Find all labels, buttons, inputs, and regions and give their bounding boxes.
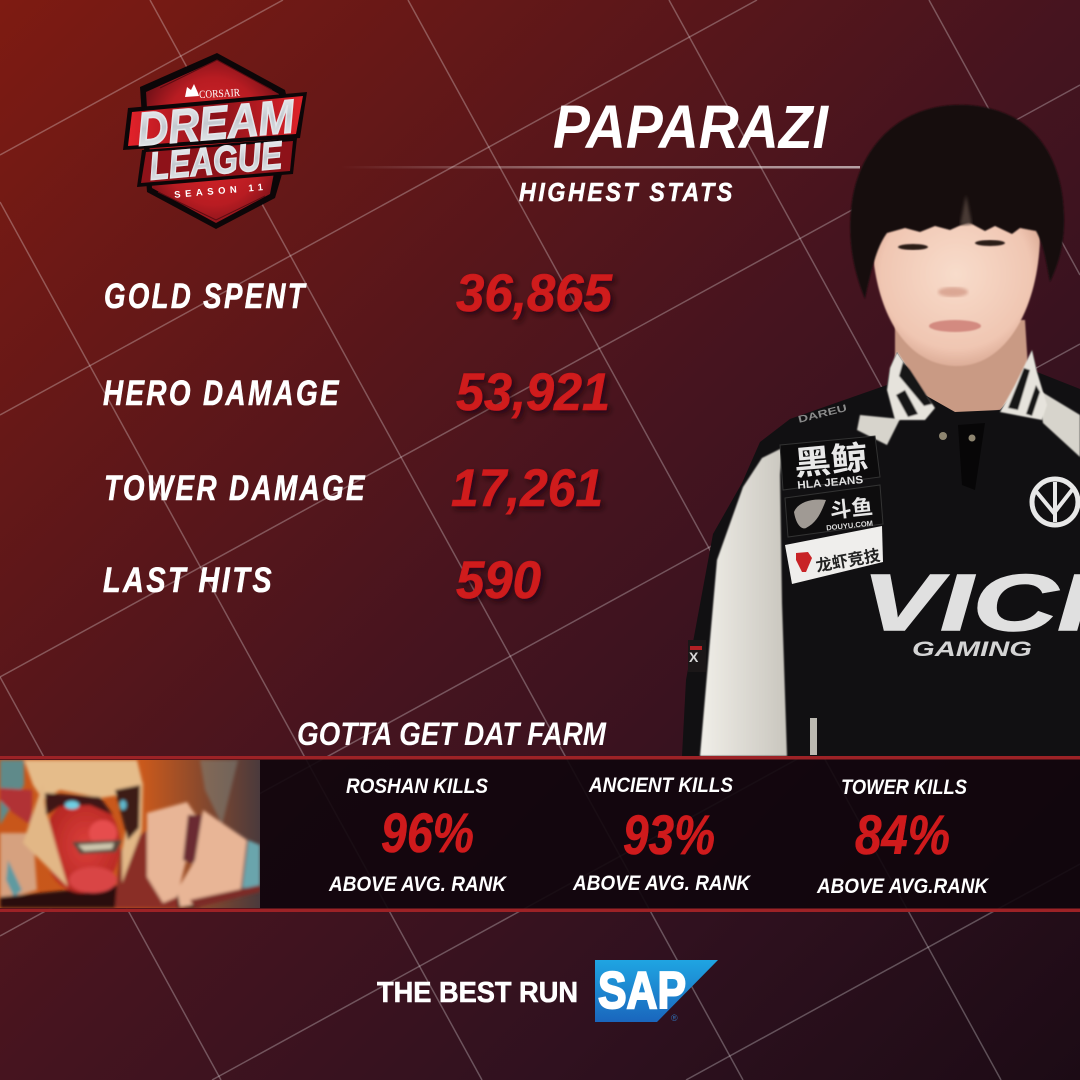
stat label: hero damage: HERO DAMAGE [103,374,341,413]
portrait: inner pocket highlight [810,718,817,755]
SAP logo shape [595,960,718,1022]
caption: above avg rank: ABOVE AVG.RANK [816,875,990,898]
stat card: roshan kills [328,774,508,896]
portrait: patch HLA JEANS: 黑鲸 [793,439,870,482]
label: roshan kills: ROSHAN KILLS [346,774,489,798]
portrait: patch DOUYU: 斗鱼 [829,496,874,523]
panel background [0,759,1080,909]
portrait: shirt opening [958,423,985,490]
portrait: jacket collar [887,350,1047,420]
value: 84%: 84% [855,803,950,866]
stat value: hero damage: 53,921 [456,363,610,422]
portrait: hair highlight [960,195,972,225]
portrait: patch HLA JEANS: HLA JEANS [797,474,864,492]
SAP registered mark: ® [671,1013,678,1023]
portrait: shoulder panels [857,389,1080,457]
stat label: last hits: LAST HITS [103,561,274,600]
portrait: mouth [929,320,981,332]
logo: DREAM wordmark: DREAM [135,89,297,156]
portrait: VICI wordmark: VICI [862,558,1080,647]
label: ancient kills: ANCIENT KILLS [588,773,734,797]
portrait: DAREU sponsor: DAREU [797,403,848,426]
stat label: gold spent: GOLD SPENT [104,277,307,316]
title: PAPARAZI: PAPARAZI [553,93,829,161]
stat card: ancient kills [572,773,752,895]
icon: lobster [796,552,812,572]
portrait: left sleeve [700,448,787,756]
portrait: face [873,222,1041,366]
stat value: last hits: 590 [456,551,541,610]
hero artwork: troll warlord [0,760,260,908]
portrait: GAMING wordmark: GAMING [912,638,1032,661]
logo: Season 11: SEASON 11 [174,182,264,201]
stats list [103,264,613,610]
player portrait [682,105,1080,756]
stat label: tower damage: TOWER DAMAGE [104,469,367,508]
portrait: patch HLA JEANS [780,436,880,492]
logo: DreamLeague Season 11 [123,53,307,229]
portrait: eyes [898,240,1005,250]
label: tower kills: TOWER KILLS [841,775,968,799]
stat value: gold spent: 36,865 [456,264,613,323]
value: 96%: 96% [381,801,474,864]
logo: CORSAIR mark: CORSAIR [199,87,241,101]
stat value: tower damage: 17,261 [451,459,603,518]
portrait: patch lobster esports [785,526,883,584]
icon: shark mascot [794,500,826,528]
logo: LEAGUE wordmark: LEAGUE [148,134,285,189]
farm stats panel [0,756,1080,912]
portrait: neck [894,319,1028,412]
portrait: nose [938,287,968,297]
portrait: VG crest [1032,479,1078,525]
portrait: patch lobster esports: 龙虾竞技 [814,546,882,576]
sponsor: the best run SAP [377,960,718,1023]
header rule [340,166,860,168]
caption: above avg rank: ABOVE AVG. RANK [572,872,752,895]
portrait: HyperX arm patch: X [689,649,699,665]
portrait: HyperX arm patch [688,640,706,672]
logo: CORSAIR mark [185,84,241,101]
portrait: patch DOUYU [785,485,883,537]
sponsor tagline: THE BEST RUN [377,977,578,1009]
panel: red top border [0,756,1080,760]
section heading: gotta get dat farm: GOTTA GET DAT FARM [297,716,607,752]
portrait: collar buttons [939,432,976,442]
portrait: hair [850,105,1064,299]
panel: red bottom border [0,908,1080,912]
subtitle: HIGHEST STATS: HIGHEST STATS [519,177,735,207]
stat card: tower kills [816,775,990,898]
value: 93%: 93% [623,803,715,866]
caption: above avg rank: ABOVE AVG. RANK [328,873,508,896]
portrait: patch DOUYU: DOUYU.COM [826,519,873,532]
portrait: jacket body [682,350,1080,756]
SAP logo wordmark: SAP [598,962,686,1020]
